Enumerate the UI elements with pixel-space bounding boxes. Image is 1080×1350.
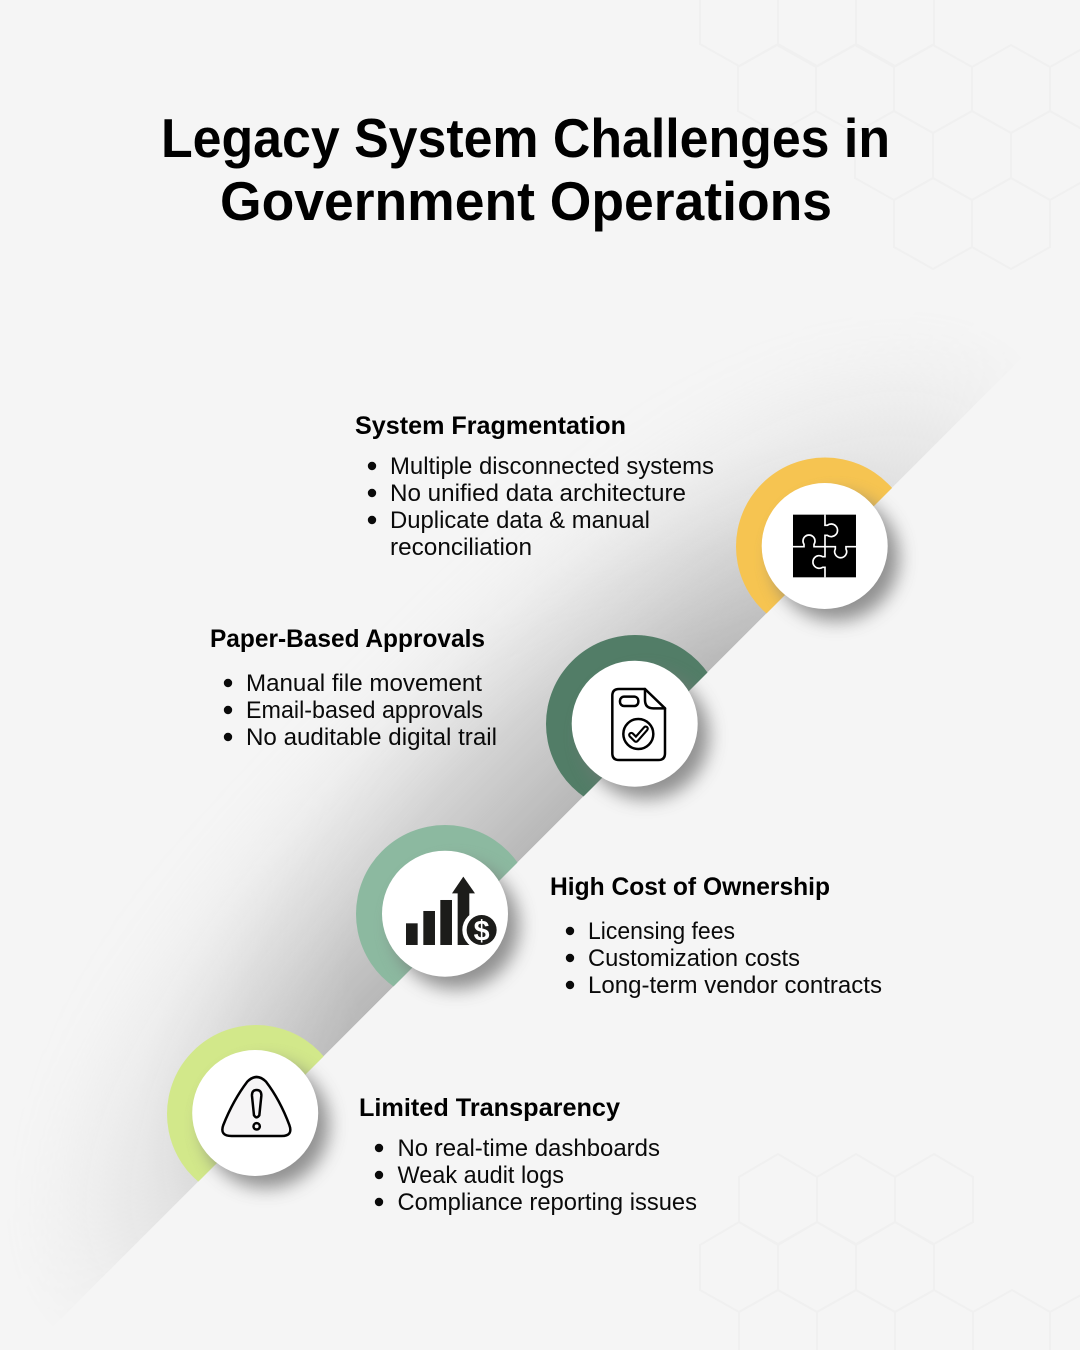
text block: Paper-Based Approvals bbox=[210, 625, 497, 751]
text block: Paper-Based Approvals: Paper-Based Approvals bbox=[210, 625, 485, 653]
title: Legacy System Challenges in bbox=[161, 107, 890, 169]
title bbox=[161, 107, 890, 232]
text block: System Fragmentation: Multiple disconnected systems bbox=[390, 453, 714, 480]
text block: Paper-Based Approvals: Manual file movement bbox=[246, 670, 482, 697]
diagonal shaded band bbox=[101, 406, 956, 1262]
text block: Paper-Based Approvals: Email-based approvals bbox=[246, 697, 483, 724]
icon: rising bars with dollar coin bbox=[406, 877, 501, 949]
title: Government Operations bbox=[220, 170, 832, 232]
icon: approved document bbox=[612, 689, 665, 760]
text block: High Cost of Ownership: Customization costs bbox=[588, 945, 800, 972]
hexagon pattern: bottom right bbox=[700, 1154, 1080, 1350]
icon: rising bars with dollar coin: $ bbox=[474, 915, 490, 947]
text block: Limited Transparency: Limited Transparency bbox=[359, 1094, 620, 1122]
text block: Paper-Based Approvals: No auditable digital trail bbox=[246, 724, 497, 751]
text block: High Cost of Ownership: Licensing fees bbox=[588, 918, 735, 945]
icon: warning triangle bbox=[222, 1077, 290, 1136]
node: puzzle bbox=[736, 458, 914, 636]
node: warning bbox=[167, 1025, 345, 1203]
text block: Limited Transparency: Compliance reporting issues bbox=[398, 1189, 697, 1216]
icon: puzzle pieces bbox=[793, 515, 856, 577]
hexagon pattern: top right bbox=[700, 0, 1080, 269]
text block: High Cost of Ownership bbox=[550, 873, 882, 999]
text block: Limited Transparency: No real-time dashboards bbox=[398, 1135, 660, 1162]
node: document bbox=[546, 635, 724, 813]
text block: High Cost of Ownership: High Cost of Ownership bbox=[550, 873, 830, 901]
text block: High Cost of Ownership: Long-term vendor contracts bbox=[588, 972, 882, 999]
node: cost chart bbox=[356, 825, 534, 1003]
text block: System Fragmentation: System Fragmentation bbox=[355, 412, 626, 440]
text block: System Fragmentation: reconciliation bbox=[390, 534, 532, 561]
text block: Limited Transparency bbox=[359, 1094, 697, 1216]
text block: System Fragmentation: No unified data architecture bbox=[390, 480, 686, 507]
text block: System Fragmentation: Duplicate data & manual bbox=[390, 507, 650, 534]
text block: Limited Transparency: Weak audit logs bbox=[398, 1162, 564, 1189]
text block: System Fragmentation bbox=[355, 412, 714, 561]
